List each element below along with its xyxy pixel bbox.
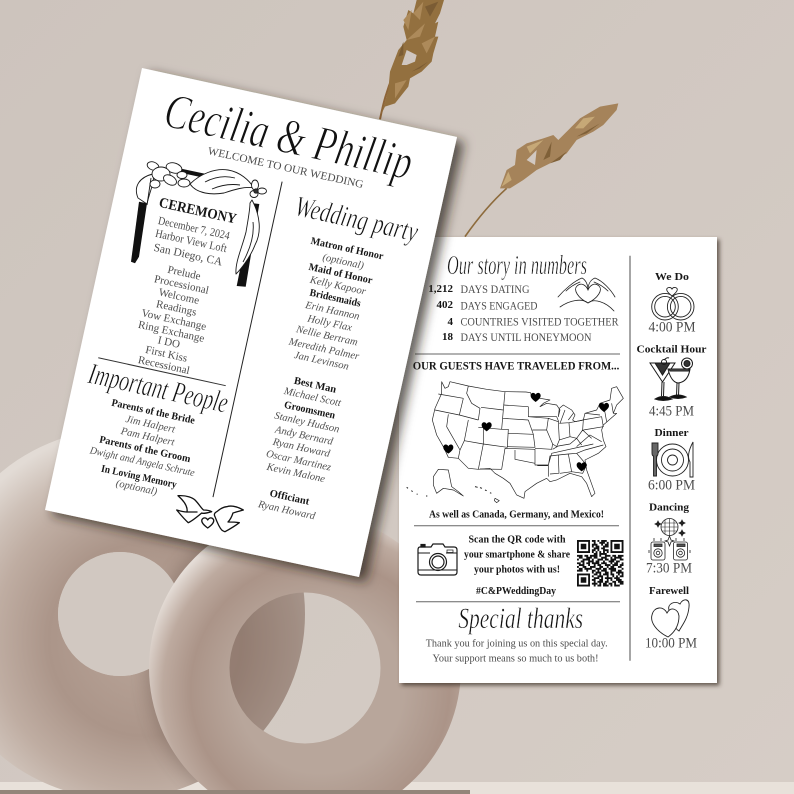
decoration: dried grass upper stem [380, 0, 444, 119]
text block: wedding party: Kelly Kapoor [308, 275, 368, 298]
text block: wedding party: Stanley Hudson [273, 411, 340, 435]
divider [415, 353, 620, 355]
text block: ceremony details: Harbor View Loft [154, 228, 229, 255]
icon: heart hands [558, 278, 615, 311]
text: thank you message [426, 639, 608, 665]
heading: our story in numbers: Our story in numbers [447, 250, 587, 280]
text block: wedding party: Oscar Martinez [265, 449, 332, 474]
timeline: farewell: 10:00 PM [645, 635, 697, 651]
text block: story numbers: 18 [442, 331, 454, 343]
text: other countries: As well as Canada, Germany, and Mexico! [429, 510, 604, 520]
icon: doves and hearts [177, 496, 243, 532]
timeline: dancing [646, 502, 692, 577]
timeline: dancing: 7:30 PM [646, 561, 692, 577]
text block: wedding party: Nellie Bertram [294, 324, 359, 348]
timeline: dinner: 6:00 PM [648, 477, 695, 493]
icon: floral arch [131, 160, 266, 287]
hearts on map [443, 393, 609, 471]
text: thank you message: Thank you for joining us on this special day. [426, 639, 608, 650]
panel: left card ceremony program [45, 68, 457, 577]
timeline: farewell [645, 585, 697, 651]
timeline: cocktail hour: 4:45 PM [649, 404, 694, 420]
icon: camera [418, 544, 457, 575]
text block: wedding party: Erin Hannon [303, 300, 360, 323]
text block: order of service: Welcome [157, 286, 200, 307]
text block: important people: Jim Halpert [124, 414, 177, 436]
divider [414, 525, 619, 527]
text block: wedding party: (optional) [321, 252, 365, 272]
arch drape [190, 170, 259, 274]
map: united states with hearts [407, 382, 623, 503]
text block: important people: In Loving Memory [100, 464, 178, 491]
text block: wedding party: Michael Scott [282, 386, 343, 409]
text block: wedding party: Groomsmen [283, 400, 336, 422]
decoration: right vase ring [149, 512, 461, 794]
timeline: dinner: Dinner [654, 427, 689, 439]
icon: qr code [577, 540, 624, 586]
icon: wedding rings [652, 287, 694, 320]
text block: story numbers [428, 283, 619, 344]
panel: right card reception schedule [399, 237, 717, 683]
text block: order of service: Prelude [166, 264, 202, 283]
text block: wedding party: Maid of Honor [308, 262, 374, 287]
text block: ceremony details: San Diego, CA [153, 242, 224, 269]
text: scan the qr code: your smartphone & share [464, 550, 570, 561]
divider [98, 358, 226, 386]
text block: wedding party: Ryan Howard [256, 499, 317, 522]
heading: wedding party: Wedding party [292, 190, 421, 248]
text block: important people: Parents of the Groom [98, 435, 192, 465]
timeline: cocktail hour: Cocktail Hour [636, 344, 707, 356]
text block: story numbers: 1,212 [428, 283, 454, 295]
text block: important people: Dwight and Angela Schrute [88, 445, 196, 479]
timeline: we do: 4:00 PM [648, 320, 696, 336]
text: scan the qr code: #C&PWeddingDay [476, 586, 557, 597]
arch posts and beam [131, 168, 259, 287]
card text rotated with the card [65, 78, 438, 541]
subtitle: welcome: WELCOME TO OUR WEDDING [207, 145, 365, 191]
text block: wedding party: Meredith Palmer [287, 336, 361, 363]
decoration: left vase ring [0, 439, 305, 790]
text block: order of service: Vow Exchange [140, 307, 207, 333]
text block: story numbers: COUNTRIES VISITED TOGETHER [460, 316, 619, 328]
text block: ceremony details [151, 215, 231, 269]
text block: wedding party: Holly Flax [305, 313, 353, 334]
text block: important people [82, 395, 207, 505]
text block: story numbers: DAYS ENGAGED [460, 300, 538, 312]
map outline and states [407, 382, 623, 503]
text block: story numbers: 4 [448, 316, 454, 328]
timeline: farewell: Farewell [649, 585, 689, 597]
icon: plate and cutlery [652, 442, 693, 477]
text block: order of service: Ring Exchange [137, 319, 206, 345]
decoration: dried grass lower stem [465, 103, 618, 237]
text block: important people: Pam Halpert [119, 426, 176, 449]
timeline: dinner [648, 427, 695, 493]
text block: story numbers: DAYS UNTIL HONEYMOON [460, 332, 592, 344]
text block: story numbers: 402 [436, 299, 454, 311]
text block: order of service: First Kiss [144, 344, 188, 365]
text block: wedding party: Andy Bernard [273, 424, 335, 448]
text block: order of service: Readings [155, 298, 198, 319]
text block: order of service: I DO [157, 334, 181, 351]
text: thank you message: Your support means so much to us both! [432, 654, 598, 665]
icon: disco ball and speakers [649, 518, 690, 560]
icon: two hearts [652, 600, 689, 637]
timeline: we do: We Do [655, 271, 690, 283]
heading: guests have traveled: OUR GUESTS HAVE TRAVELED FROM... [413, 360, 619, 372]
heading: special thanks: Special thanks [458, 602, 583, 635]
text block: order of service: Recessional [137, 354, 191, 377]
text: scan the qr code: your photos with us! [474, 564, 560, 575]
text block: wedding party: Matron of Honor [310, 236, 385, 263]
text block: wedding party: Kevin Malone [265, 462, 326, 485]
text block: wedding party: Officiant [269, 488, 311, 508]
text block: important people: (optional) [115, 478, 159, 498]
column divider [629, 256, 631, 661]
divider [416, 601, 620, 603]
timeline: cocktail hour [636, 344, 707, 420]
title: names: Cecilia & Phillip [160, 82, 418, 190]
arch flowers [136, 160, 266, 205]
text block: wedding party [251, 236, 385, 525]
text block: wedding party: Ryan Howard [271, 437, 332, 460]
text block: order of service: Processional [153, 273, 210, 297]
text: scan the qr code: Scan the QR code with [468, 535, 566, 546]
heading: important people: Important People [85, 357, 231, 420]
timeline: dancing: Dancing [649, 502, 690, 514]
text block: story numbers: DAYS DATING [460, 284, 530, 296]
text block: wedding party: Best Man [293, 376, 337, 396]
heading: ceremony: CEREMONY [157, 195, 238, 228]
text block: wedding party: Bridesmaids [309, 288, 362, 310]
text block: order of service [130, 260, 218, 379]
timeline: we do [648, 271, 696, 336]
text block: important people: Parents of the Bride [110, 398, 196, 427]
icon: cocktails [650, 358, 692, 400]
column divider [213, 182, 282, 497]
text block: wedding party: Jan Levinson [293, 350, 350, 373]
shelf [0, 782, 794, 794]
text block: ceremony details: December 7, 2024 [157, 215, 231, 243]
text: scan the qr code [464, 535, 570, 597]
